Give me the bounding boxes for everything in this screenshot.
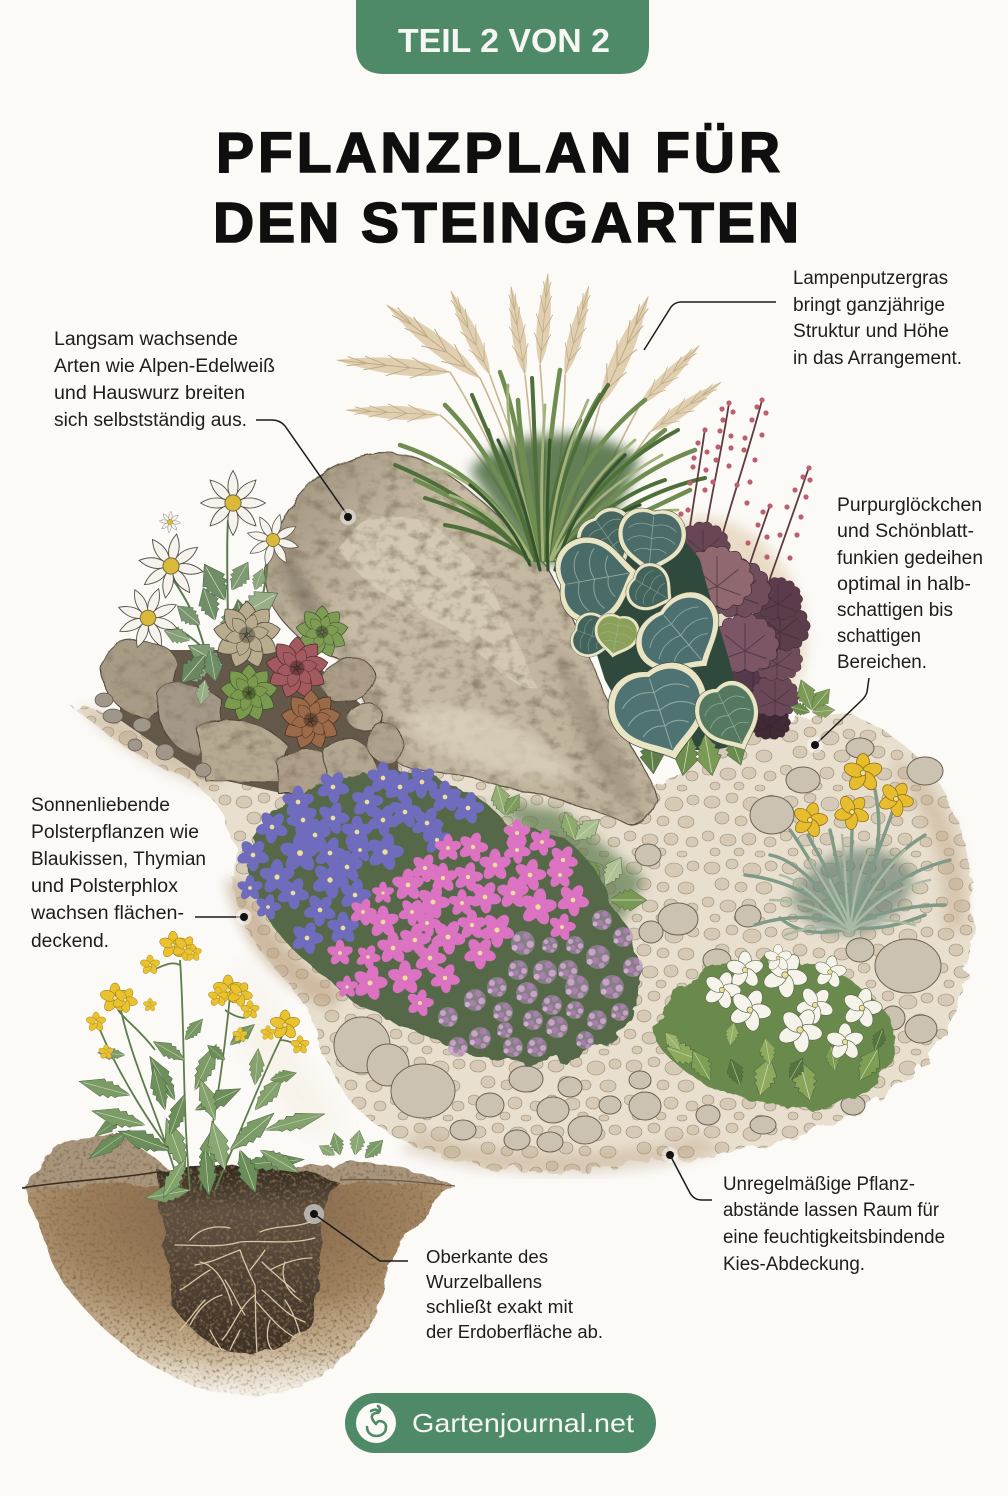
plant: small green shrub behind phlox xyxy=(487,781,647,925)
plant: hauswurz rosettes xyxy=(212,601,349,751)
callout: kies-abdeckung: Unregelmäßige Pflanz- xyxy=(723,1174,915,1195)
callout: wurzelballen: der Erdoberfläche ab. xyxy=(426,1322,603,1342)
plant: lampenputzergras blades xyxy=(395,370,705,570)
callout: wurzelballen: Wurzelballens xyxy=(426,1272,542,1292)
callout: kies-abdeckung: Kies-Abdeckung. xyxy=(723,1254,865,1275)
callout: lampenputzergras: Struktur und Höhe xyxy=(793,321,949,342)
callout: kies-abdeckung xyxy=(662,1147,945,1275)
gravel ground xyxy=(68,703,976,1179)
callout: lampenputzergras: bringt ganzjährige xyxy=(793,295,945,316)
blue cushion: blaukissen xyxy=(229,758,489,959)
callout: purpurglöckchen und funkien: funkien gedeihen xyxy=(837,548,983,569)
title: DEN STEINGARTEN xyxy=(213,191,799,255)
title: PFLANZPLAN FÜR xyxy=(216,121,780,185)
callout: polsterpflanzen: Blaukissen, Thymian xyxy=(31,849,206,870)
callout: polsterpflanzen: Polsterpflanzen wie xyxy=(31,822,199,843)
plant: alpen-edelweiß xyxy=(108,471,305,706)
callout: polsterpflanzen: und Polsterphlox xyxy=(31,876,179,897)
stone wall xyxy=(95,639,402,795)
plant: hosta base foliage xyxy=(570,527,750,778)
callout: kies-abdeckung: abstände lassen Raum für xyxy=(723,1200,940,1221)
callout: wurzelballen: schließt exakt mit xyxy=(426,1297,573,1317)
plant: white flowering cushion xyxy=(655,943,894,1107)
callout: polsterpflanzen: deckend. xyxy=(31,931,109,952)
callout: wurzelballen xyxy=(304,1204,603,1342)
plant: purpurglöckchen flower spikes xyxy=(678,397,813,587)
cushion plants base foliage xyxy=(245,772,639,1063)
large boulder xyxy=(265,453,658,826)
header tab xyxy=(356,0,649,74)
callout: purpurglöckchen und funkien: schattigen xyxy=(837,626,921,647)
header tab: TEIL 2 VON 2 xyxy=(398,22,610,59)
plant: hosta leaves xyxy=(551,499,836,775)
thyme cushion xyxy=(438,910,643,1057)
plant: yellow flowering plant with stems xyxy=(77,930,388,1206)
callout: purpurglöckchen und funkien xyxy=(807,495,983,753)
callout: polsterpflanzen: wachsen flächen- xyxy=(30,903,184,924)
plant: purpurglöckchen leaves xyxy=(650,522,810,739)
callout: alpen-edelweiß und hauswurz: Arten wie Alpen-Edelweiß xyxy=(54,356,275,377)
callout: alpen-edelweiß und hauswurz: sich selbstständig aus. xyxy=(54,410,247,431)
soil cross-section xyxy=(22,1133,455,1396)
callout: purpurglöckchen und funkien: Bereichen. xyxy=(837,652,927,673)
plant: gold-yellow alpine with silver leaves xyxy=(745,753,950,935)
callout: lampenputzergras: in das Arrangement. xyxy=(793,348,962,369)
root ball xyxy=(157,1166,340,1354)
callout: alpen-edelweiß und hauswurz: Langsam wachsende xyxy=(54,329,238,350)
callout: purpurglöckchen und funkien: schattigen bis xyxy=(837,600,953,621)
callout: purpurglöckchen und funkien: und Schönblatt- xyxy=(837,521,974,542)
footer badge: Gartenjournal.net xyxy=(412,1408,635,1438)
callout: lampenputzergras xyxy=(644,268,962,369)
callout: wurzelballen: Oberkante des xyxy=(426,1247,548,1267)
callout: alpen-edelweiß und hauswurz xyxy=(54,329,356,525)
callout: polsterpflanzen: Sonnenliebende xyxy=(31,795,170,816)
plant: purpurglöckchen halo xyxy=(660,517,806,700)
large river pebbles xyxy=(334,738,943,1152)
icon: plant in pot logo xyxy=(356,1403,396,1443)
title xyxy=(213,121,799,255)
callout: purpurglöckchen und funkien: Purpurglöckchen xyxy=(837,495,982,516)
callout: lampenputzergras: Lampenputzergras xyxy=(793,268,948,289)
footer badge xyxy=(345,1393,656,1453)
callout: kies-abdeckung: eine feuchtigkeitsbindende xyxy=(723,1227,945,1248)
callout: polsterpflanzen xyxy=(30,795,252,952)
callout: purpurglöckchen und funkien: optimal in halb- xyxy=(837,574,971,595)
plant: lampenputzergras plumes xyxy=(335,272,727,540)
pink cushion: polsterphlox xyxy=(326,819,596,1020)
callout: alpen-edelweiß und hauswurz: und Hauswurz breiten xyxy=(54,383,245,404)
